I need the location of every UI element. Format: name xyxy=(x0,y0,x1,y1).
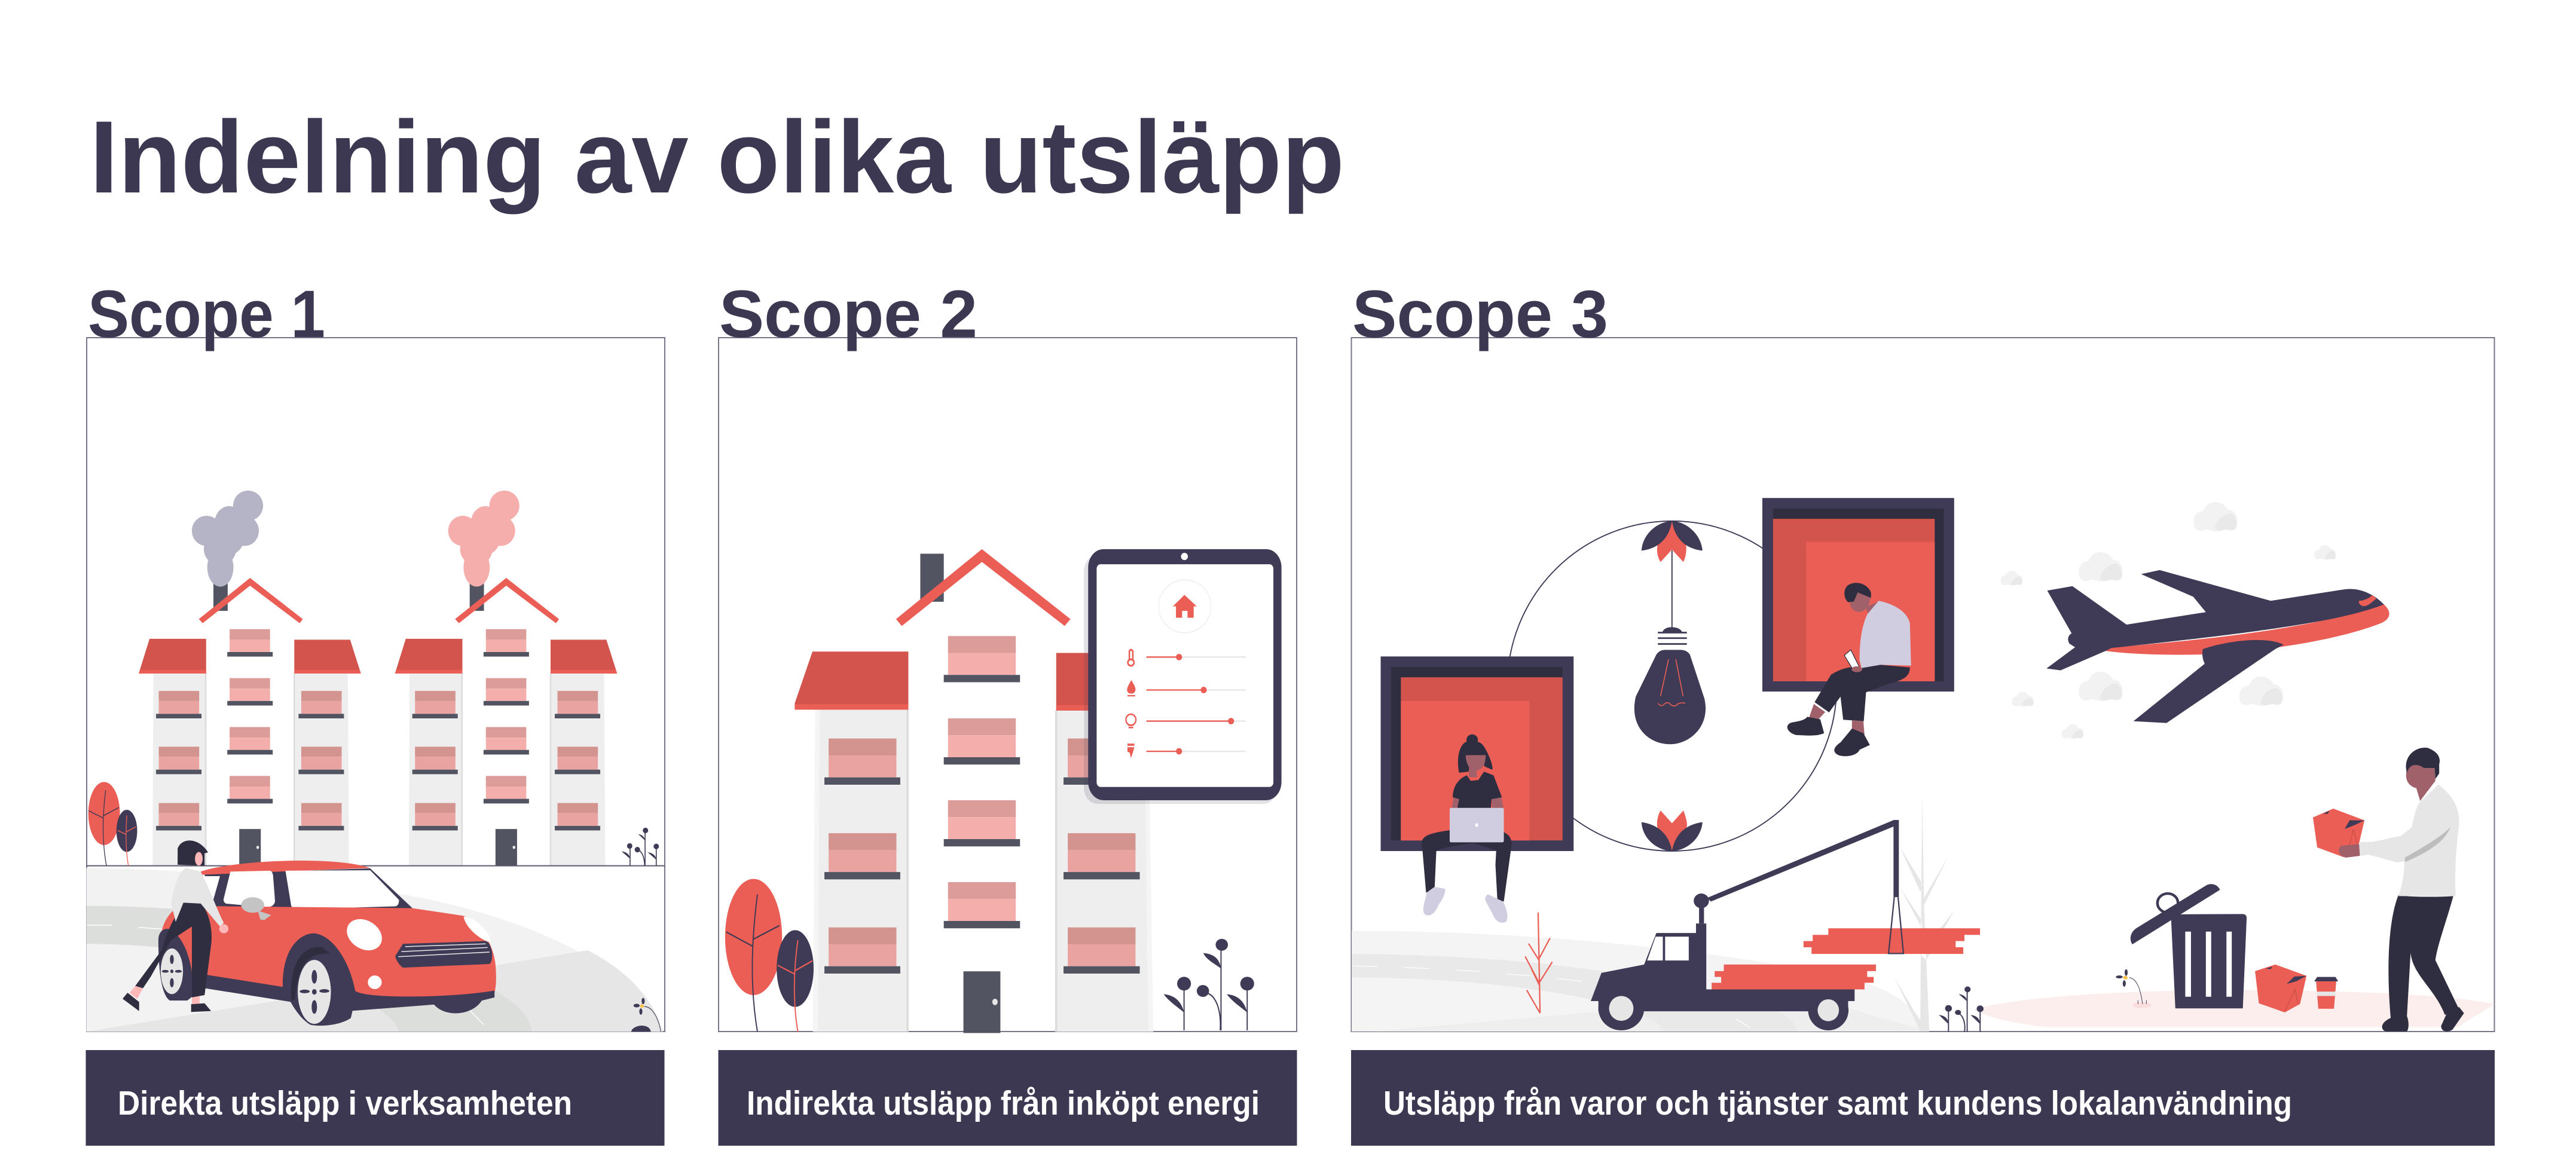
gray tree xyxy=(1894,794,1954,1032)
person with phone xyxy=(1787,583,1911,756)
panel frame: scope 1 xyxy=(87,338,665,1032)
scene: scope 2 building and tablet xyxy=(725,549,1282,1033)
caption bar: Scope 3: Utsläpp från varor och tjänster samt kundens lokalanvändning xyxy=(1383,1084,2292,1122)
panel: scope 3 illustration xyxy=(1351,338,2495,1032)
trees xyxy=(725,879,814,1032)
man holding box xyxy=(2313,748,2464,1032)
caption bar: Scope 2 xyxy=(719,1050,1297,1146)
apartment building xyxy=(795,549,1153,1033)
small plants xyxy=(1939,987,1984,1032)
flower xyxy=(2116,969,2152,1008)
airplane xyxy=(2046,570,2389,723)
caption bar: Scope 1 xyxy=(86,1050,665,1146)
panel frame: scope 3 xyxy=(1351,338,2494,1032)
clouds xyxy=(2001,502,2336,739)
truck with crane xyxy=(1591,820,1980,1030)
takeaway box on ground xyxy=(2255,965,2306,1012)
light bulb with flowers xyxy=(1634,521,1706,851)
grey smoke cloud xyxy=(192,491,263,587)
trash can xyxy=(2131,884,2247,1008)
panel: scope 1 illustration xyxy=(86,338,665,1032)
icon: home xyxy=(1159,580,1211,633)
title: Indelning av olika utsläpp xyxy=(90,100,1344,215)
left window frame xyxy=(1381,656,1573,851)
panel frame: scope 2 xyxy=(719,338,1297,1032)
icon: flame xyxy=(1127,680,1135,696)
icon: light bulb xyxy=(1126,714,1136,727)
sliders xyxy=(1146,654,1246,754)
scene: scope 3 right part xyxy=(1939,502,2495,1032)
right apartment building xyxy=(395,578,617,865)
icon: thermometer xyxy=(1128,650,1134,666)
horizon line xyxy=(86,865,665,867)
flower and bush xyxy=(631,998,661,1032)
scene: scope 3 left part xyxy=(1352,498,1980,1032)
small plants xyxy=(1163,939,1254,1030)
small plants xyxy=(622,828,659,865)
pink smoke cloud xyxy=(448,491,520,587)
right window frame xyxy=(1762,498,1954,691)
person with laptop xyxy=(1422,735,1512,923)
woman leaning on car xyxy=(123,840,228,1012)
caption bar: Scope 1: Direkta utsläpp i verksamheten xyxy=(118,1084,572,1122)
icon: plug xyxy=(1127,743,1135,758)
left apartment building xyxy=(139,578,361,865)
ground and road xyxy=(86,868,663,1032)
car xyxy=(158,861,496,1026)
red plant xyxy=(1525,913,1553,1013)
panel: scope 2 illustration xyxy=(719,338,1297,1033)
pink ground ellipse xyxy=(1974,990,2495,1027)
scene: scope 1 buildings and car xyxy=(86,491,665,1032)
circle line xyxy=(1507,521,1836,851)
coffee cup xyxy=(2314,977,2338,1009)
trees xyxy=(88,782,137,865)
caption bar: Scope 3 xyxy=(1351,1050,2495,1146)
heading: Scope 3: Scope 3 xyxy=(1352,277,1608,351)
heading: Scope 2: Scope 2 xyxy=(719,277,977,351)
heading: Scope 1: Scope 1 xyxy=(88,277,325,351)
ground and road xyxy=(1352,931,1928,1032)
tablet xyxy=(1084,549,1282,804)
caption bar: Scope 2: Indirekta utsläpp från inköpt energi xyxy=(747,1084,1260,1122)
